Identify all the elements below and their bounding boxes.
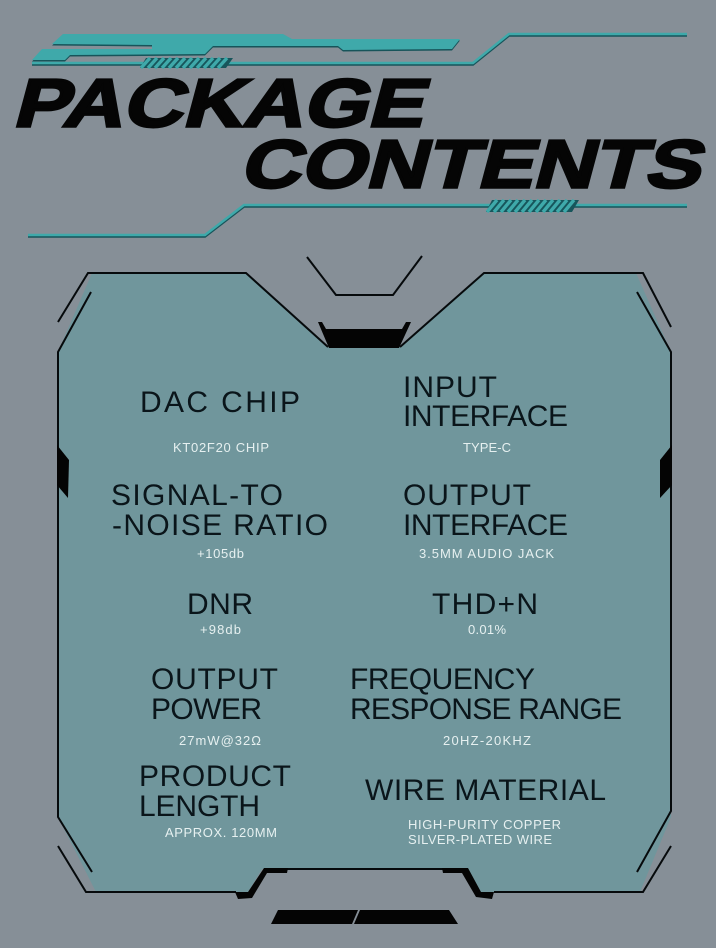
spec: output power: OUTPUT (151, 663, 278, 696)
spec: product length: APPROX. 120MM (165, 825, 277, 840)
spec: product length: PRODUCT (139, 760, 291, 793)
spec: dnr: +98db (200, 622, 241, 637)
spec: product length: LENGTH (139, 790, 260, 823)
spec: output power (151, 663, 278, 748)
panel: specifications background (58, 273, 671, 892)
spec: signal-to-noise ratio: SIGNAL-TO (111, 479, 283, 512)
spec: frequency response range: 20HZ-20KHZ (443, 733, 531, 748)
spec: output power: POWER (151, 693, 262, 726)
title line: package: PACKAGE (8, 65, 439, 141)
black tab: bottom notch left (235, 868, 288, 899)
header ornament: bottom teal circuit line (28, 200, 687, 236)
spec: signal-to-noise ratio: -NOISE RATIO (112, 509, 328, 542)
spec: input interface (403, 371, 568, 455)
spec: frequency response range: RESPONSE RANGE (350, 693, 622, 726)
spec: dac chip (140, 386, 300, 455)
top bracket (307, 256, 422, 295)
spec: input interface: INTERFACE (403, 400, 568, 433)
spec: output interface: INTERFACE (403, 509, 568, 542)
spec: signal-to-noise ratio: +105db (197, 546, 244, 561)
spec: wire material: HIGH-PURITY COPPER (408, 817, 561, 832)
spec: wire material (365, 774, 606, 847)
header ornament: top teal circuit lines (32, 34, 687, 68)
panel frame (58, 256, 671, 892)
spec: output interface (403, 479, 568, 561)
spec: input interface: INPUT (403, 371, 497, 404)
title: package contents (8, 65, 716, 202)
spec: wire material: WIRE MATERIAL (365, 774, 606, 807)
spec: dnr (187, 588, 253, 637)
spec: output interface: OUTPUT (403, 479, 531, 512)
spec: dnr: DNR (187, 588, 253, 621)
spec: frequency response range: FREQUENCY (350, 663, 535, 696)
black bars: bottom center (271, 910, 458, 924)
spec: input interface: TYPE-C (463, 440, 511, 455)
spec: dac chip: KT02F20 CHIP (173, 440, 269, 455)
spec: frequency response range (350, 663, 622, 748)
black tab: right side (660, 445, 672, 498)
black tab: bottom notch right (442, 868, 494, 899)
spec: output interface: 3.5MM AUDIO JACK (419, 546, 554, 561)
black tab: left side (57, 445, 69, 498)
spec: output power: 27mW@32Ω (179, 733, 261, 748)
black tab: top center (318, 322, 411, 348)
spec: dac chip: DAC CHIP (140, 386, 300, 419)
spec: product length (139, 760, 291, 840)
spec: thd+n: 0.01% (468, 622, 506, 637)
spec: wire material: SILVER-PLATED WIRE (408, 832, 552, 847)
title line: contents: CONTENTS (235, 126, 716, 202)
spec: thd+n (432, 588, 538, 637)
spec: signal-to-noise ratio (111, 479, 328, 561)
spec: thd+n: THD+N (432, 588, 538, 621)
